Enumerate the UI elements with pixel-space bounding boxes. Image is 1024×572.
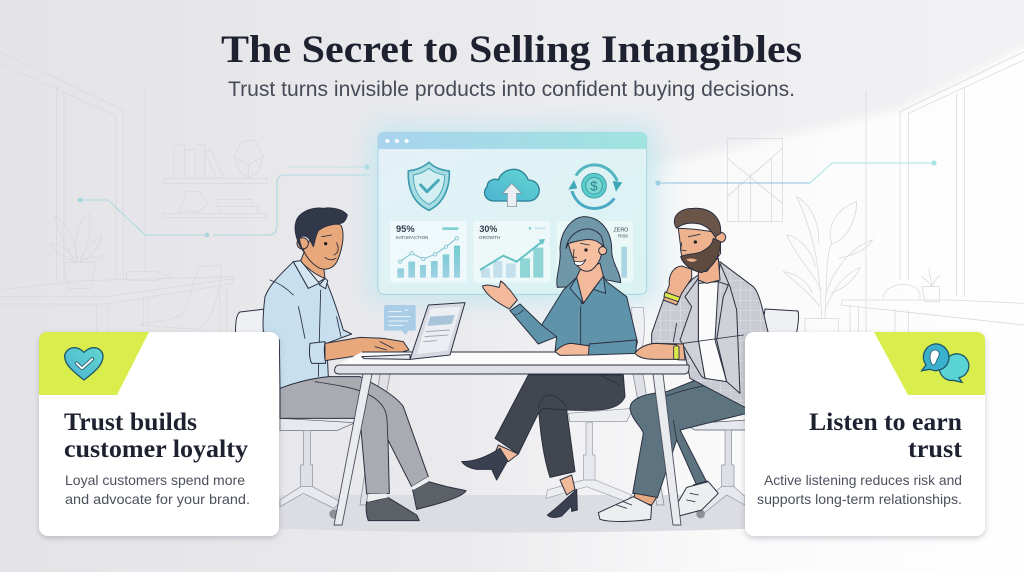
beard xyxy=(681,238,721,273)
face xyxy=(303,224,343,269)
chat bubble xyxy=(384,305,416,335)
icon: dollar cycle xyxy=(568,165,622,208)
metric card: growth: GROWTH xyxy=(479,235,500,240)
trousers xyxy=(630,377,747,498)
sneakers xyxy=(598,497,652,521)
table back legs xyxy=(360,374,664,505)
trousers xyxy=(280,377,428,494)
hair xyxy=(557,217,621,287)
person: man with laptop xyxy=(263,208,466,521)
hair xyxy=(674,208,721,237)
heading: trust xyxy=(908,436,963,463)
metric card: satisfaction: 95% xyxy=(396,224,415,234)
metric card: growth: 30% xyxy=(479,224,497,234)
connector lines xyxy=(78,160,937,237)
icon: listening bubbles xyxy=(922,344,969,382)
blazer xyxy=(652,262,768,408)
lime accent xyxy=(874,332,985,395)
chair back: left xyxy=(236,309,266,345)
face xyxy=(678,228,721,272)
table top xyxy=(335,352,690,374)
shoes xyxy=(366,497,419,521)
metric card: zero risk: RISK xyxy=(618,234,628,239)
body text: and advocate for your brand. xyxy=(65,491,250,507)
fringe xyxy=(566,229,604,248)
table legs xyxy=(334,374,681,525)
body text: Loyal customers spend more xyxy=(65,472,245,488)
table hand xyxy=(635,343,685,360)
table hand xyxy=(555,343,590,355)
chair: woman xyxy=(546,307,644,502)
laptop xyxy=(362,303,465,359)
icon: heart xyxy=(65,348,103,380)
dashboard panel xyxy=(378,132,647,294)
left office line art xyxy=(0,52,267,340)
floor xyxy=(235,495,800,532)
body text: Active listening reduces risk and xyxy=(764,472,962,488)
collar xyxy=(570,277,583,303)
browser header xyxy=(378,132,647,149)
chair: left person xyxy=(280,418,355,519)
neck xyxy=(301,250,325,278)
chair: right person xyxy=(683,420,747,518)
icon: cloud upload xyxy=(485,169,539,207)
blouse xyxy=(510,276,637,353)
body text: supports long-term relationships. xyxy=(757,491,962,507)
metric card: zero risk: ZERO xyxy=(614,228,628,234)
heading: Listen to earn xyxy=(809,409,962,436)
hands over table xyxy=(555,340,679,359)
metric card: satisfaction xyxy=(390,221,467,282)
t-shirt xyxy=(698,282,727,382)
icon: shield xyxy=(408,162,449,210)
card: trust builds customer loyalty xyxy=(39,332,279,536)
dashboard glow xyxy=(368,124,658,304)
right office line art xyxy=(727,52,1024,333)
raised hand xyxy=(482,281,517,309)
neck xyxy=(698,258,720,283)
title: The Secret to Selling Intangibles xyxy=(221,28,802,71)
chin hand and forearm xyxy=(663,266,692,305)
card: listen to earn trust xyxy=(745,332,985,536)
back leg xyxy=(538,403,575,477)
heading: customer loyalty xyxy=(64,436,249,463)
metric card: growth xyxy=(473,221,550,282)
left sleeve xyxy=(673,323,743,343)
upper trousers and crossed leg xyxy=(495,375,625,454)
heel shoe xyxy=(547,489,577,517)
lime accent xyxy=(39,332,149,395)
neck and chest xyxy=(577,263,603,303)
person: bearded man xyxy=(598,208,768,521)
chair back: right xyxy=(760,309,798,345)
metric card: zero risk xyxy=(557,221,633,282)
person: woman xyxy=(462,217,637,517)
shirt xyxy=(263,262,352,388)
heading: Trust builds xyxy=(64,409,197,436)
lapels xyxy=(680,278,705,378)
face xyxy=(568,238,602,271)
icon: dollar cycle: $ xyxy=(590,179,598,194)
hair xyxy=(295,208,347,253)
subtitle: Trust turns invisible products into confident buying decisions. xyxy=(228,78,795,101)
arm xyxy=(325,337,409,361)
metric card: satisfaction: SATISFACTION xyxy=(396,235,428,240)
